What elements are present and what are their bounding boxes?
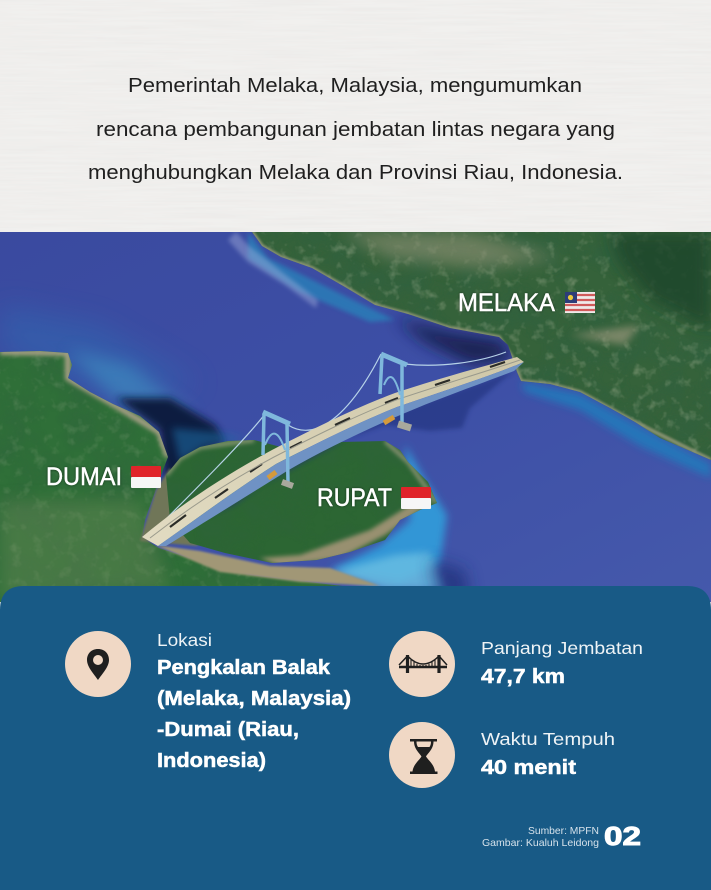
- icon: hourglass: [389, 722, 455, 788]
- mudflat south of Rupat: [155, 545, 380, 586]
- land: Dumai: [0, 351, 342, 602]
- paper background: [0, 0, 711, 232]
- flag: Indonesia: [131, 466, 161, 488]
- flag: Malaysia: [565, 292, 595, 313]
- land: Rupat: [166, 440, 437, 563]
- flag: Indonesia: [401, 487, 431, 509]
- source credits: Gambar: Kualuh Leidong: [482, 837, 599, 849]
- bridge shadow: [222, 374, 508, 512]
- source credits: [482, 825, 599, 849]
- bridge: [142, 352, 524, 546]
- bridge deck: [142, 357, 524, 546]
- intro text: rencana pembangunan jembatan lintas negara yang: [96, 118, 615, 141]
- mud channel between Dumai and Rupat: [140, 468, 198, 546]
- travel time item: [389, 722, 615, 788]
- deck lane line: [150, 360, 520, 538]
- bridge length label: Panjang Jembatan: [481, 638, 643, 658]
- intro text: menghubungkan Melaka dan Provinsi Riau, Indonesia.: [88, 161, 623, 184]
- intro text: [88, 74, 623, 184]
- label: Rupat: [318, 487, 431, 509]
- info panel: [0, 586, 711, 890]
- label: Dumai: DUMAI: [46, 463, 122, 491]
- sea shading: [0, 232, 711, 600]
- tower: far: [380, 354, 411, 428]
- bridge length item: [389, 631, 643, 697]
- travel time value: 40 menit: [481, 757, 576, 779]
- deck lane markings: [170, 362, 505, 527]
- icon: bridge: [389, 631, 455, 697]
- deck side: [158, 362, 524, 546]
- page number: 02: [604, 821, 641, 851]
- label: Rupat: RUPAT: [317, 484, 392, 512]
- location value: Pengkalan Balak: [157, 657, 331, 679]
- icon: map pin: [65, 631, 131, 697]
- intro text: Pemerintah Melaka, Malaysia, mengumumkan: [128, 74, 582, 97]
- bridge length value: 47,7 km: [481, 666, 565, 688]
- source credits: Sumber: MPFN: [528, 825, 599, 837]
- label: Dumai: [46, 466, 161, 488]
- location label: Lokasi: [157, 630, 212, 650]
- sea: [0, 232, 711, 602]
- label: Melaka: MELAKA: [458, 289, 555, 317]
- tower: near: [263, 412, 293, 486]
- travel time label: Waktu Tempuh: [481, 729, 615, 749]
- location value: Indonesia): [157, 750, 266, 772]
- label: Melaka: [458, 292, 595, 313]
- location value: [157, 657, 351, 772]
- location item: [65, 630, 351, 772]
- land: Melaka: [240, 232, 711, 472]
- main cables: [166, 352, 506, 518]
- location value: (Melaka, Malaysia): [157, 688, 351, 710]
- location value: -Dumai (Riau,: [157, 719, 299, 741]
- satellite map with bridge: [0, 232, 711, 605]
